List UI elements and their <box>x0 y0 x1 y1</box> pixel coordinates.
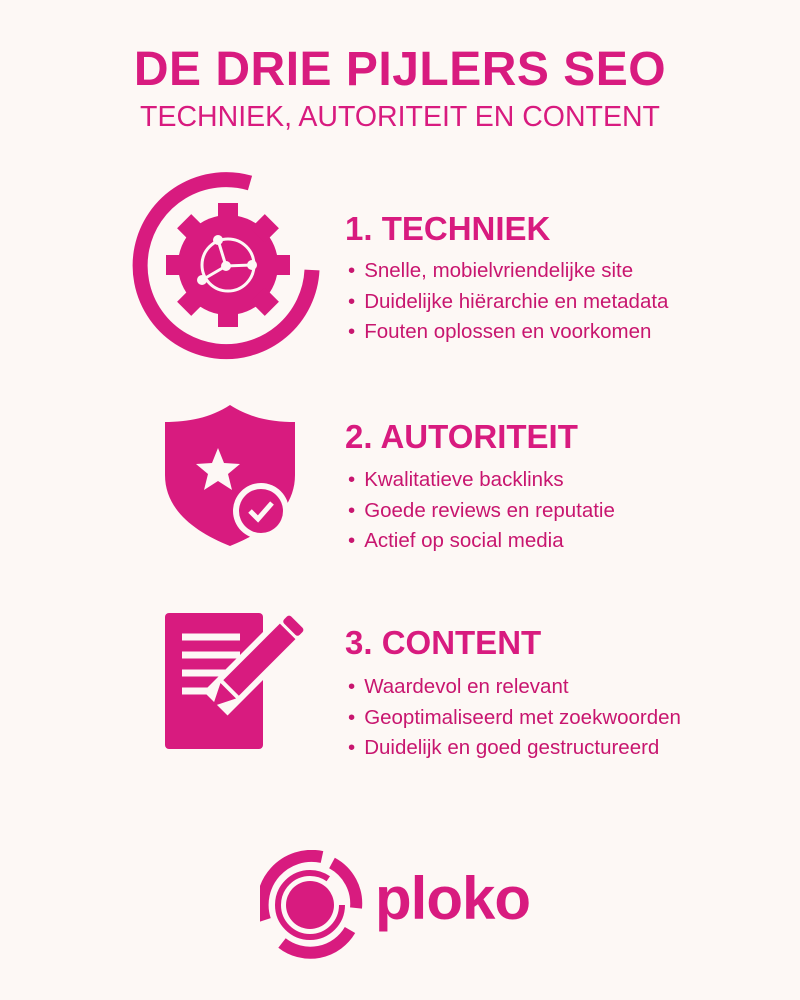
icon: gear <box>132 172 320 360</box>
logo <box>260 850 530 959</box>
bullets 1 <box>348 259 668 343</box>
bullets 3: Duidelijk en goed gestructureerd <box>364 736 659 759</box>
icon: shield <box>165 405 295 546</box>
icon: document with pencil <box>165 613 304 749</box>
bullets 1: Duidelijke hiërarchie en metadata <box>364 290 668 312</box>
bullets 1: Snelle, mobielvriendelijke site <box>364 259 633 282</box>
bullets 2: Actief op social media <box>364 529 564 552</box>
bullets 3 <box>348 675 681 759</box>
bullets 3: Waardevol en relevant <box>364 675 569 698</box>
subtitle: TECHNIEK, AUTORITEIT EN CONTENT <box>140 101 660 133</box>
bullets 2: Kwalitatieve backlinks <box>364 468 564 491</box>
heading 3: 3. CONTENT <box>345 624 541 661</box>
heading 2: 2. AUTORITEIT <box>345 418 578 455</box>
bullets 2 <box>348 468 615 552</box>
bullets 2: Goede reviews en reputatie <box>364 498 615 522</box>
bullets 3: Geoptimaliseerd met zoekwoorden <box>364 706 681 728</box>
title: DE DRIE PIJLERS SEO <box>134 43 666 96</box>
logo: ploko <box>375 865 530 932</box>
heading 1: 1. TECHNIEK <box>345 210 550 247</box>
bullets 1: Fouten oplossen en voorkomen <box>364 320 651 343</box>
